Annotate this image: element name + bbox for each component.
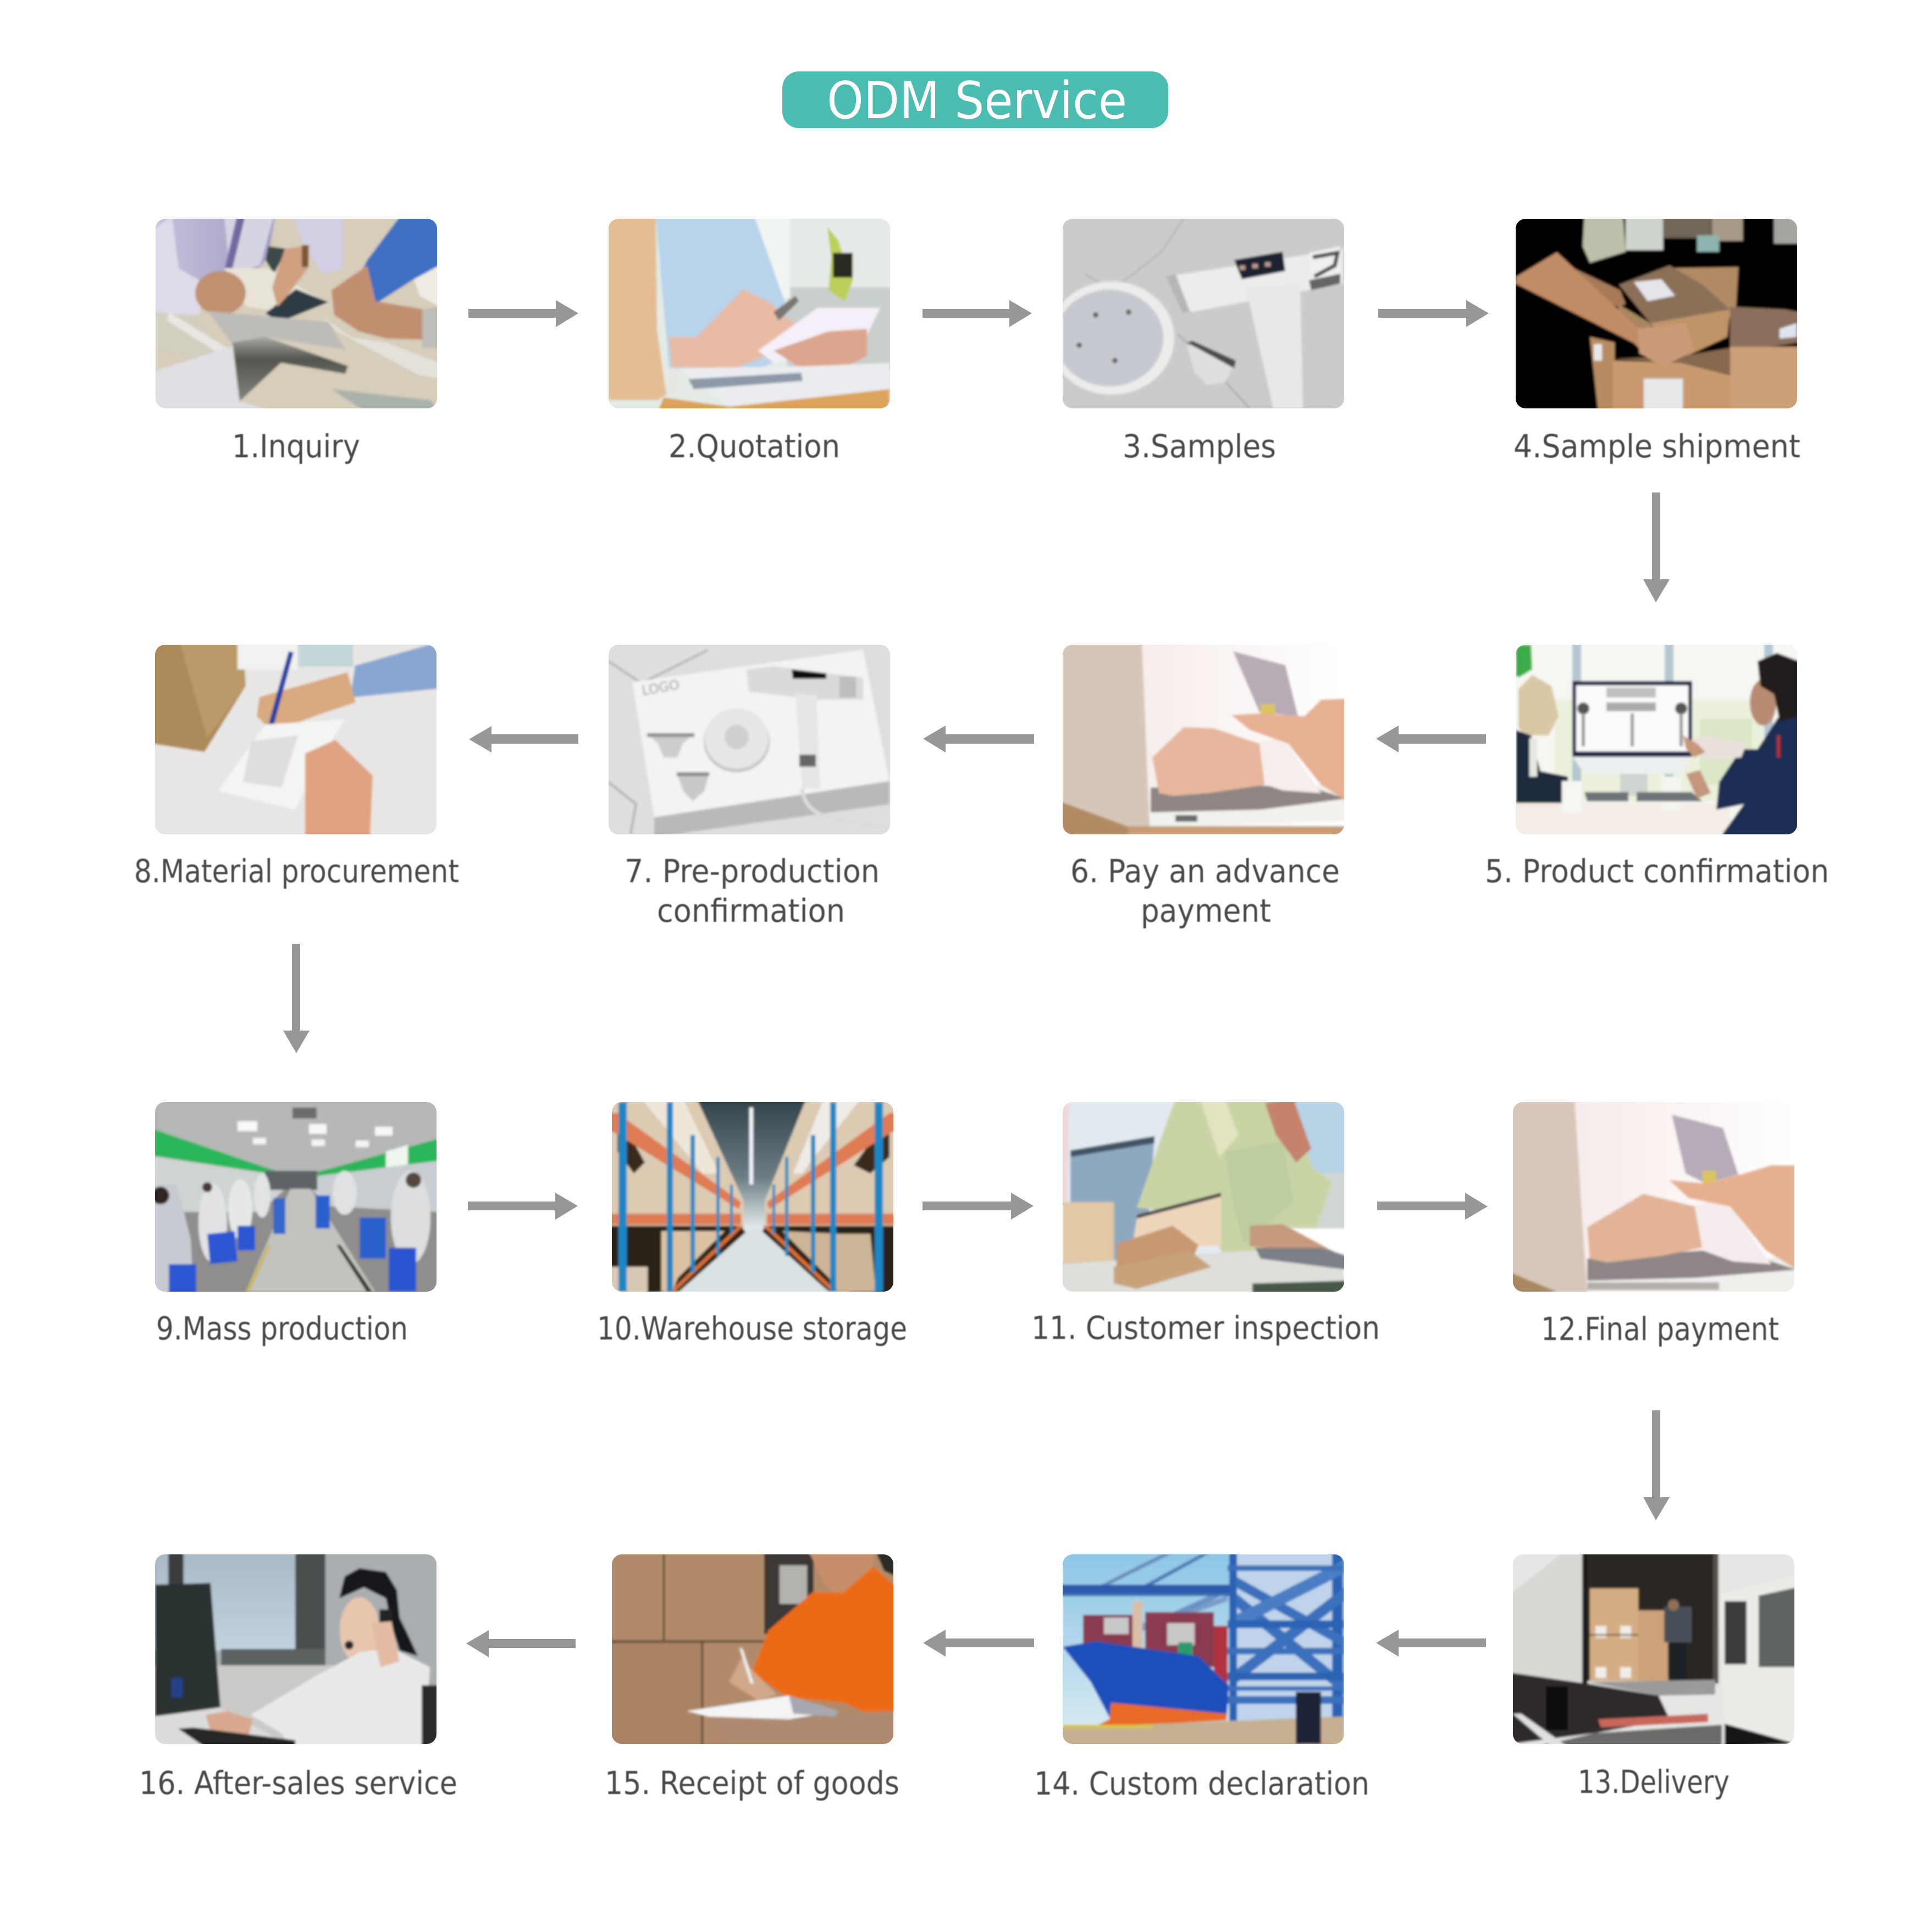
photo: support agent with headset [152,1552,439,1748]
label: confirmation [657,892,845,929]
photo: paying online with card [1060,642,1349,837]
title: ODM Service [827,71,1127,130]
photo: truck being unloaded [1510,1552,1797,1747]
label: 7. Pre-production [625,852,880,890]
label: 3.Samples [1123,428,1276,465]
label: 15. Receipt of goods [605,1764,899,1802]
label: 13.Delivery [1578,1763,1730,1801]
photo: meeting at a monitor [1513,642,1800,837]
label [625,852,880,929]
label: 9.Mass production [156,1310,408,1347]
photo: product on packaging board: LOGO [640,677,681,699]
photo: container ship at port [1060,1552,1347,1747]
arrow: 7 to 8 [469,726,578,752]
step 5: product confirmation [1485,642,1829,890]
step 15: receipt of goods [605,1552,899,1802]
label: 5. Product confirmation [1485,852,1829,890]
arrow: 2 to 3 [922,300,1032,327]
label: 4.Sample shipment [1513,428,1800,465]
label: 16. After-sales service [139,1764,457,1802]
arrow: 12 to 13 [1643,1410,1670,1520]
photo: factory production line [152,1099,441,1294]
label: 10.Warehouse storage [597,1310,907,1347]
step 14: custom declaration [1034,1552,1369,1802]
arrow: 1 to 2 [468,300,578,327]
step 10: warehouse storage [597,1099,907,1347]
step 7: pre-production confirmation [606,642,893,929]
arrow: 13 to 14 [1376,1630,1486,1657]
photo: hair dryer and diffuser [1049,216,1347,411]
photo: worker checking boxes [609,1552,896,1747]
step 4: sample shipment [1513,216,1802,465]
step 12: final payment [1510,1099,1797,1348]
step 16: after-sales service [139,1552,457,1802]
arrow: 9 to 10 [468,1193,578,1220]
photo: signing a form next to a box [152,642,439,837]
photo: hands with phone [606,216,893,411]
step 9: mass production [152,1099,441,1347]
photo: final online card payment [1510,1099,1797,1294]
label: 12.Final payment [1541,1310,1779,1348]
arrow: 3 to 4 [1378,300,1489,327]
step 3: samples [1049,216,1347,465]
arrow: 15 to 16 [466,1630,576,1657]
label: 14. Custom declaration [1034,1765,1369,1802]
arrow: 8 to 9 [283,944,310,1053]
label: payment [1141,892,1271,929]
photo: meeting with tablet [153,216,440,411]
step 11: customer inspection [1031,1099,1380,1347]
arrow: 10 to 11 [922,1193,1034,1220]
photo: product on packaging board [606,642,893,837]
photo: warehouse aisle [609,1099,896,1294]
label: 1.Inquiry [232,428,360,465]
label: 11. Customer inspection [1031,1309,1380,1347]
label [1070,852,1340,929]
label: 8.Material procurement [134,852,459,890]
step 6: pay an advance payment [1060,642,1349,929]
step 13: delivery [1510,1552,1797,1801]
label: 6. Pay an advance [1070,852,1340,890]
arrow: 5 to 6 [1376,726,1486,752]
step 2: quotation [606,216,893,465]
photo: woman at desk with notebook [1060,1099,1346,1296]
arrow: 11 to 12 [1377,1193,1488,1220]
arrow: 14 to 15 [923,1630,1034,1657]
label: 2.Quotation [669,428,840,465]
step 1: inquiry [153,216,440,465]
photo: boxes loaded in a van [1513,216,1802,412]
step 8: material procurement [134,642,459,890]
arrow: 4 to 5 [1643,492,1670,602]
arrow: 6 to 7 [923,726,1034,752]
